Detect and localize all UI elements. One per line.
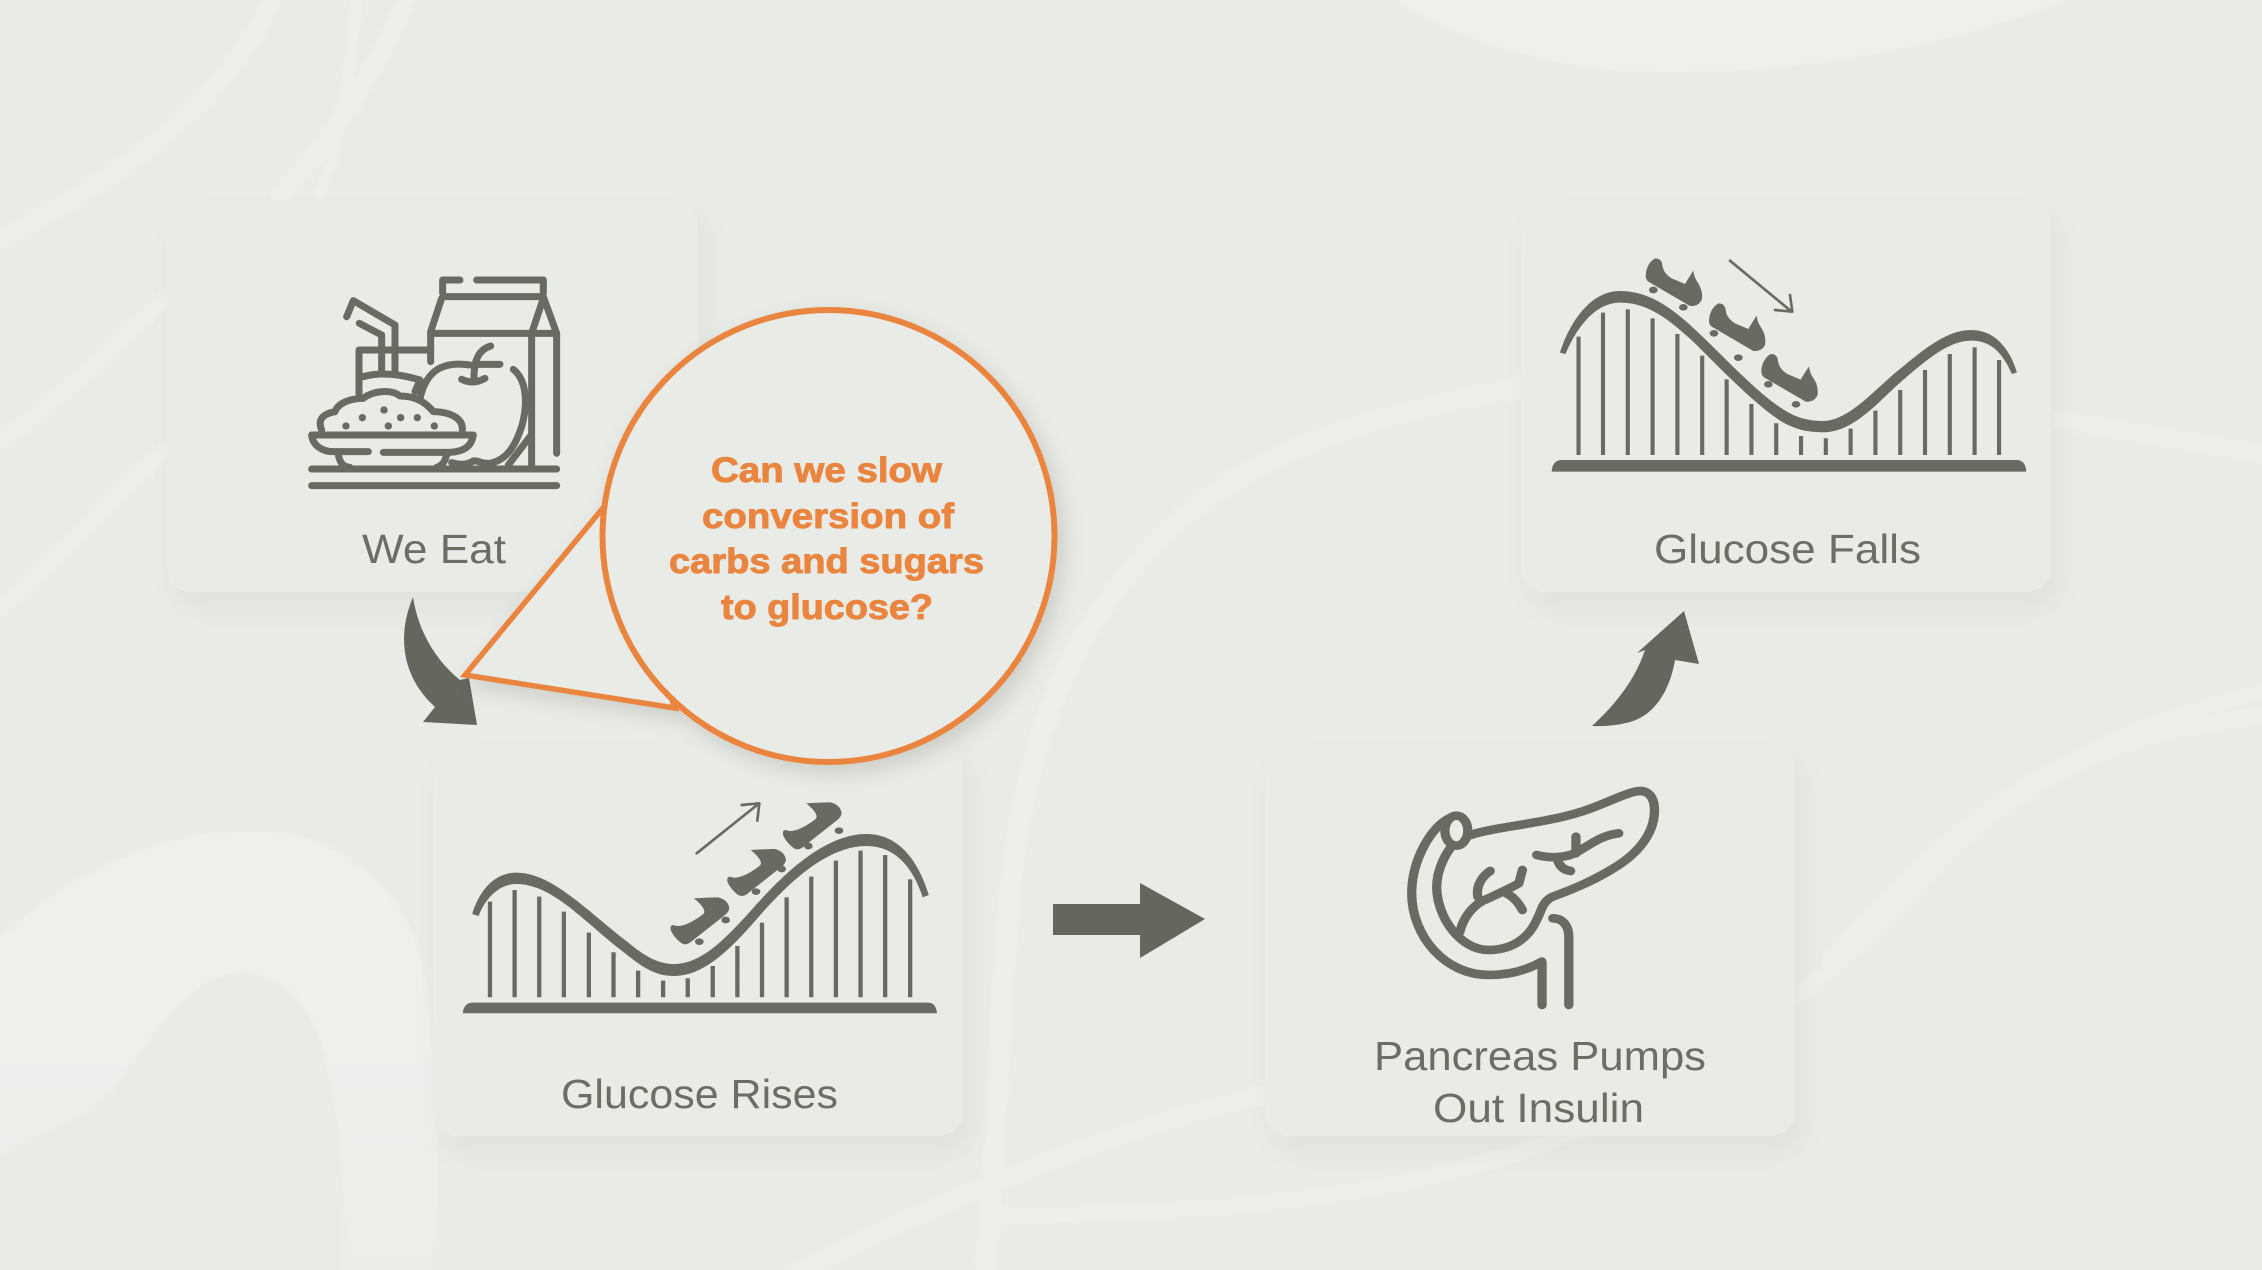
icon: roller coaster going up (463, 802, 937, 1013)
label: glucose rises: Glucose Rises (561, 1071, 838, 1117)
callout text (669, 451, 984, 627)
arrow: pancreas to falls (1592, 611, 1699, 726)
callout text: to glucose? (721, 588, 933, 627)
icon: food and drink (312, 280, 557, 486)
panel: glucose rises (433, 744, 963, 1136)
callout text: Can we slow (711, 451, 943, 490)
icon: pancreas (1412, 791, 1654, 1005)
label: we eat: We Eat (362, 526, 507, 572)
icon: roller coaster going down (1552, 258, 2026, 472)
arrow: eat to rises (404, 597, 477, 725)
panel: pancreas pumps out insulin (1265, 744, 1795, 1136)
panel: glucose falls (1521, 200, 2051, 592)
callout text: carbs and sugars (669, 542, 984, 581)
arrow: rises to pancreas (1053, 883, 1205, 958)
callout text: conversion of (702, 497, 954, 536)
label: pancreas pumps: Pancreas Pumps (1374, 1033, 1706, 1079)
label: glucose falls: Glucose Falls (1654, 526, 1921, 572)
callout: slow conversion question (465, 310, 1054, 762)
panel: we eat (167, 200, 698, 592)
label: out insulin: Out Insulin (1433, 1085, 1644, 1131)
